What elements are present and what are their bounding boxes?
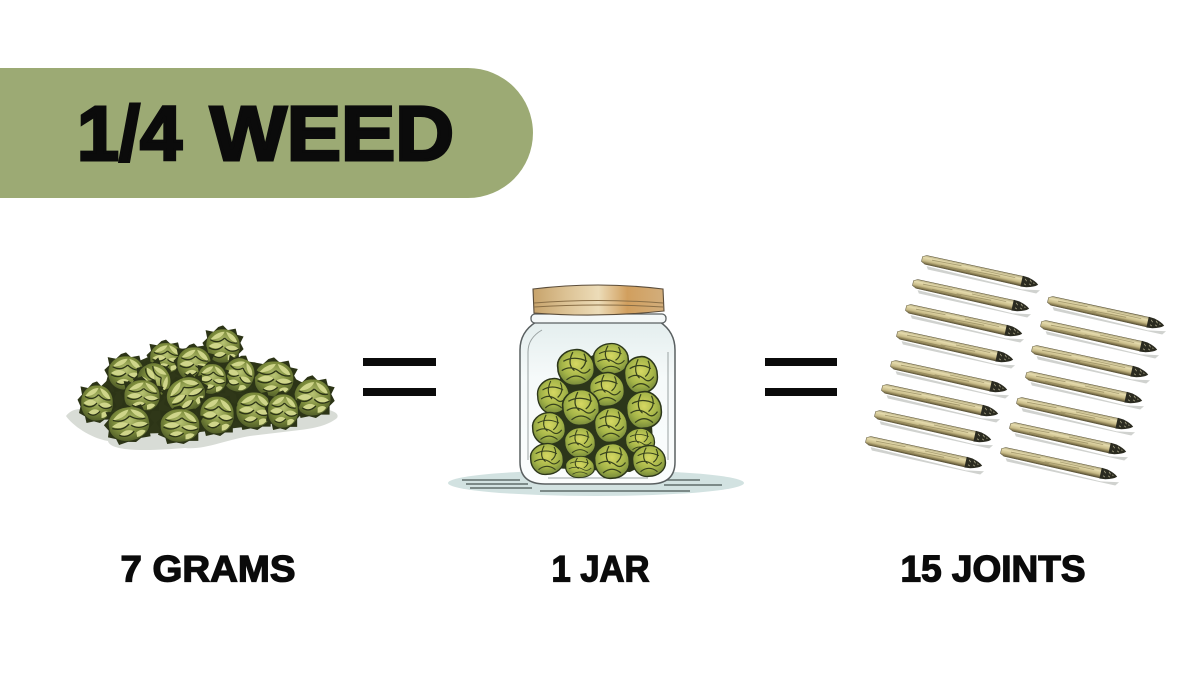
equals sign 1 [363, 358, 436, 396]
label: 15 joints: 15 JOINTS [900, 548, 1086, 590]
left column of joints [864, 254, 1042, 475]
title text: WEED [210, 91, 454, 177]
right column of joints [999, 295, 1168, 486]
jar neck [531, 314, 666, 323]
panel: 15 joints [864, 254, 1168, 486]
buds [78, 325, 335, 447]
panel: 7 grams pile of buds [66, 325, 338, 450]
jar lid [533, 285, 664, 315]
label: 7 grams: 7 GRAMS [120, 548, 296, 590]
jar glass [520, 322, 675, 484]
title banner [0, 68, 533, 198]
title text [77, 91, 454, 177]
jar buds [531, 344, 665, 478]
title text: 1/4 [77, 91, 182, 177]
equals sign 2 [765, 358, 837, 396]
panel: 1 jar [448, 285, 744, 496]
label: 1 jar: 1 JAR [552, 548, 650, 590]
